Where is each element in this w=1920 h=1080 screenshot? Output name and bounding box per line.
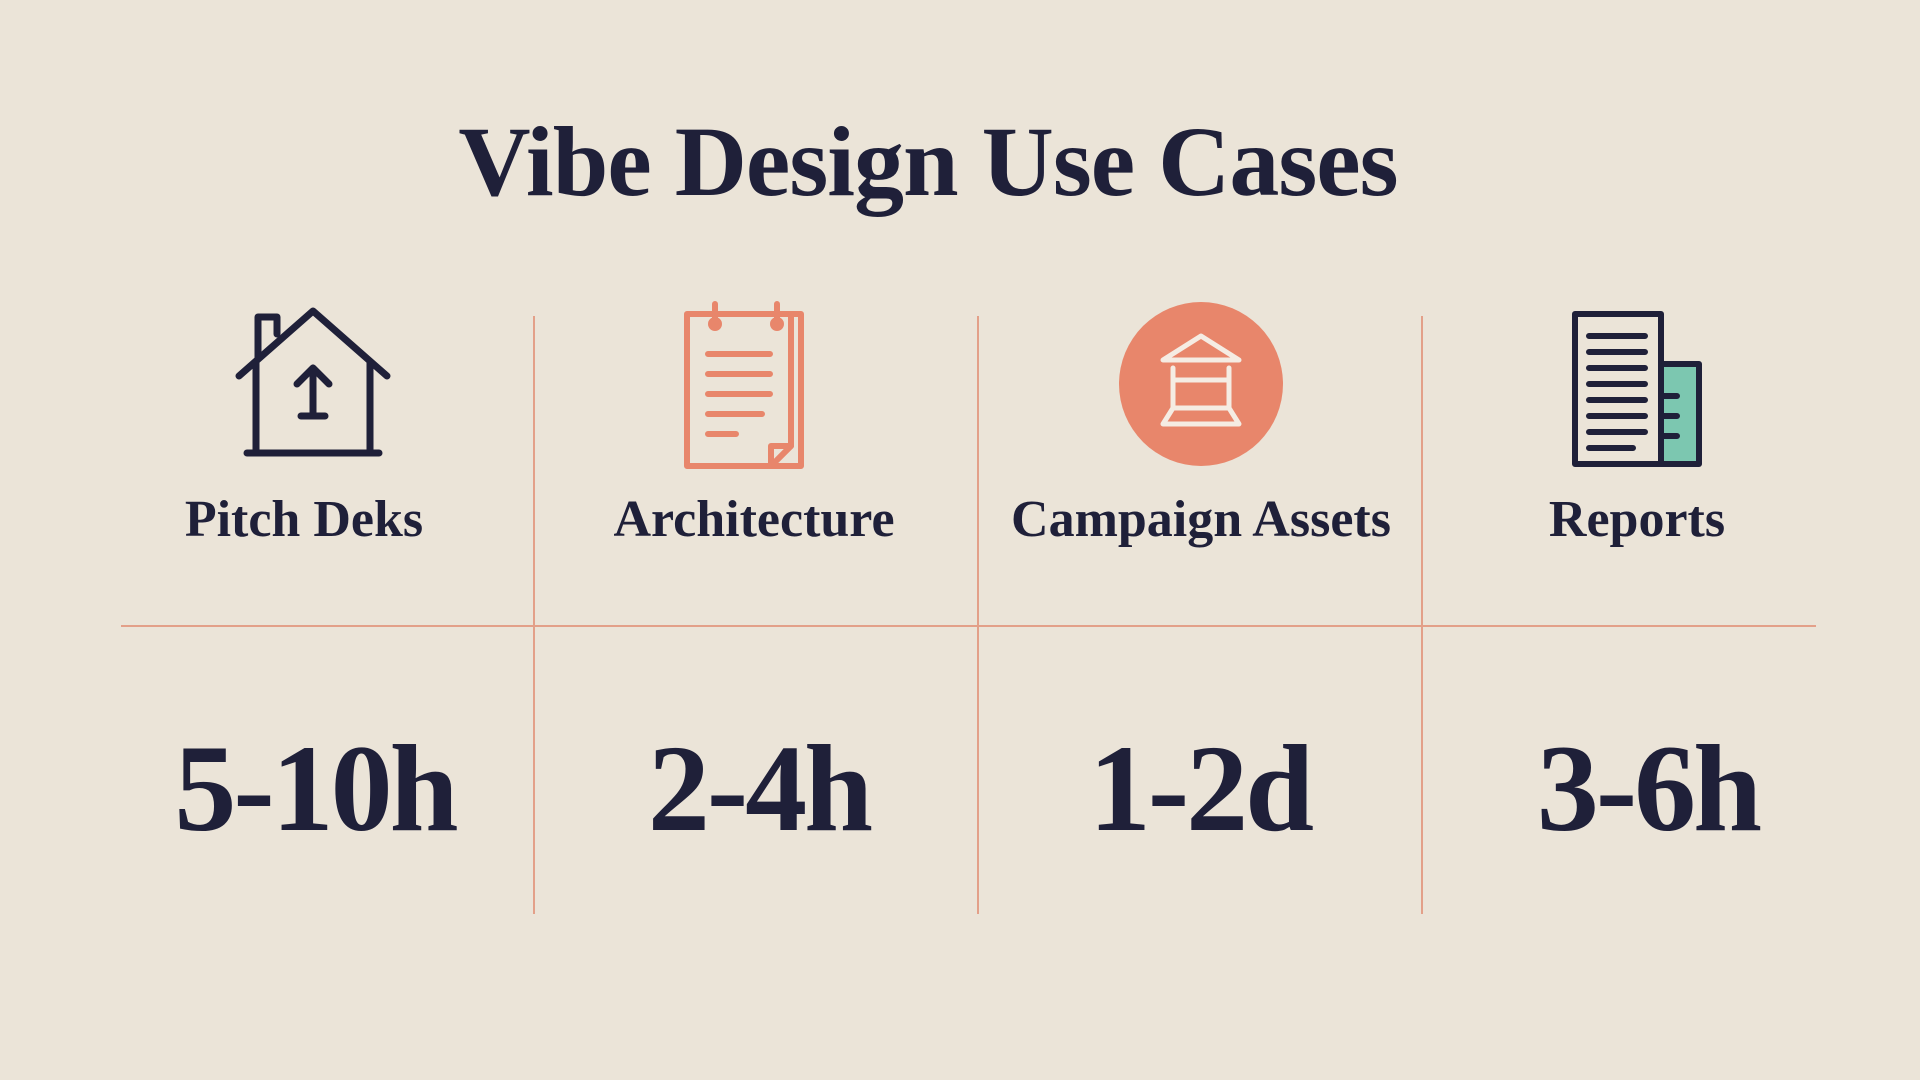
number: 1-2d: 1-2d: [1089, 720, 1311, 857]
number: 5-10h: 5-10h: [174, 720, 456, 857]
icon: notepad: [684, 301, 804, 469]
icon: reports document: [1572, 311, 1702, 467]
label: Campaign Assets: Campaign Assets: [1011, 491, 1391, 548]
icon: building in coral circle: [1119, 302, 1283, 466]
label: Pitch Deks: Pitch Deks: [185, 491, 423, 548]
number: 2-4h: 2-4h: [648, 720, 870, 857]
icon: house: [236, 308, 390, 456]
label: Architecture: Architecture: [613, 491, 895, 548]
number: 3-6h: 3-6h: [1537, 720, 1759, 857]
title: Vibe Design Use Cases: [458, 106, 1398, 217]
label: Reports: Reports: [1549, 491, 1725, 548]
